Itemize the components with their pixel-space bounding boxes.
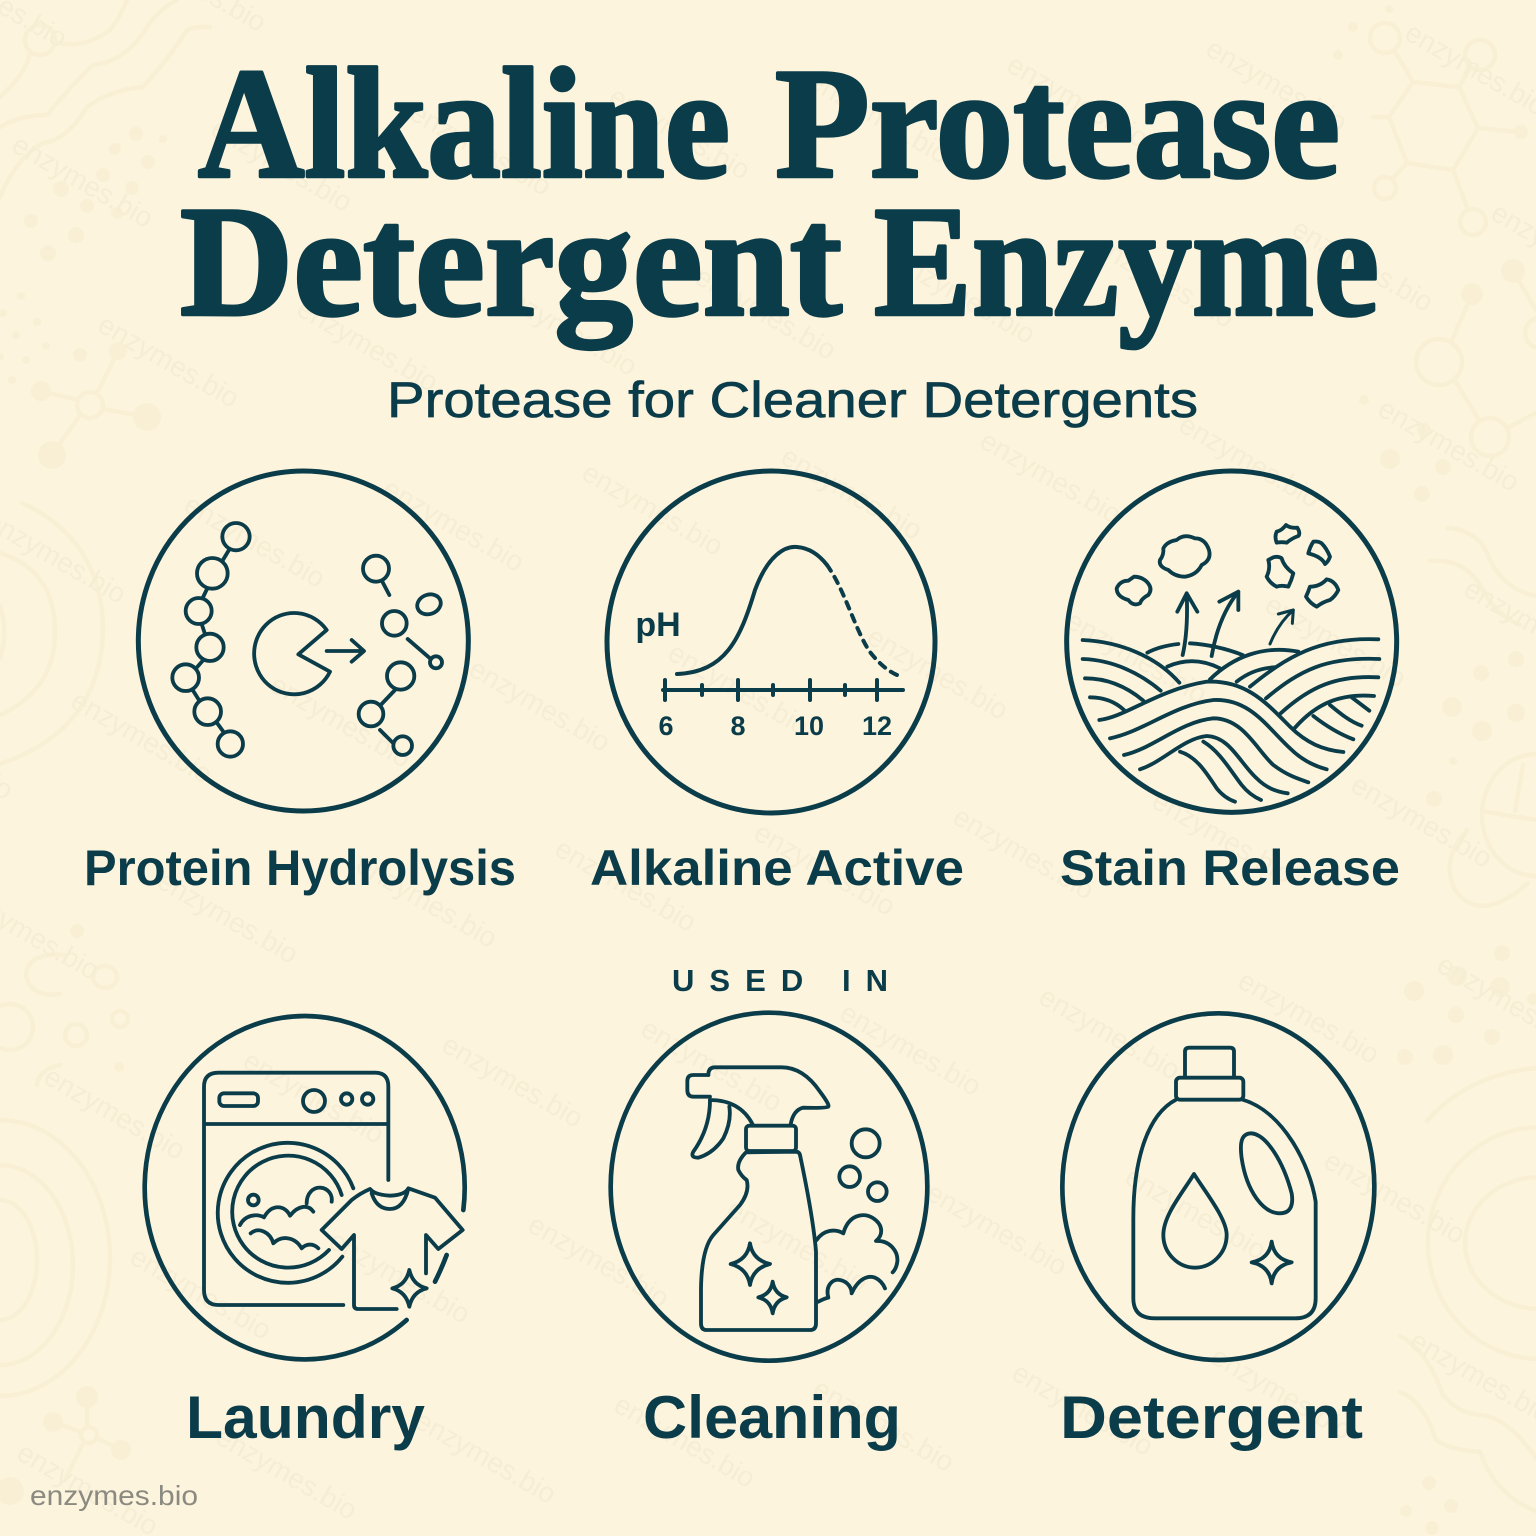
panel: alkaline active — [590, 471, 964, 896]
icon: spray bottle — [611, 1013, 927, 1361]
panel: laundry — [145, 1016, 465, 1451]
icon: pH activity curve: 6 — [658, 711, 674, 741]
icon: pH activity curve: 12 — [862, 711, 892, 741]
title: Detergent — [180, 174, 842, 350]
watermarks: enzymes.bio — [808, 1372, 960, 1478]
panel: stain release — [1060, 471, 1400, 896]
watermarks: enzymes.bio — [1147, 784, 1299, 890]
watermarks: enzymes.bio — [1319, 1144, 1471, 1250]
subtitle: Protease for Cleaner Detergents — [387, 372, 1198, 428]
watermarks: enzymes.bio — [1233, 964, 1385, 1070]
panel: protein hydrolysis — [84, 471, 516, 896]
title — [180, 36, 1379, 350]
title: Protease — [775, 36, 1340, 212]
watermarks: enzymes.bio — [1061, 604, 1213, 710]
watermarks: enzymes.bio — [921, 1176, 1073, 1282]
watermarks: enzymes.bio — [663, 636, 815, 742]
label: protein hydrolysis: Protein Hydrolysis — [84, 840, 516, 896]
watermarks: enzymes.bio — [604, 80, 756, 186]
watermarks: enzymes.bio — [1174, 408, 1326, 514]
watermarks: enzymes.bio — [378, 472, 530, 578]
title: Enzyme — [874, 174, 1379, 350]
watermarks: enzymes.bio — [292, 292, 444, 398]
icon: stain release — [1067, 471, 1397, 812]
watermarks: enzymes.bio — [1120, 1160, 1272, 1266]
watermarks: enzymes.bio — [577, 456, 729, 562]
watermarks: enzymes.bio — [179, 488, 331, 594]
watermarks: enzymes.bio — [405, 96, 557, 202]
watermarks: enzymes.bio — [464, 652, 616, 758]
icon: pH activity curve: 10 — [794, 711, 824, 741]
watermarks: enzymes.bio — [776, 440, 928, 546]
watermarks: enzymes.bio — [835, 996, 987, 1102]
watermarks: enzymes.bio — [324, 1224, 476, 1330]
label: stain release: Stain Release — [1060, 840, 1400, 896]
watermarks: enzymes.bio — [265, 668, 417, 774]
icon: pH activity curve: 8 — [730, 711, 746, 741]
icon: pH activity curve: pH — [635, 606, 681, 644]
watermarks: enzymes.bio — [523, 1208, 675, 1314]
icon: washing machine and shirt — [145, 1016, 465, 1359]
watermarks: enzymes.bio — [125, 1240, 277, 1346]
watermarks: enzymes.bio — [491, 276, 643, 382]
watermarks: enzymes.bio — [93, 308, 245, 414]
watermarks: enzymes.bio — [66, 684, 218, 790]
watermarks: enzymes.bio — [351, 848, 503, 954]
icon: detergent bottle — [1062, 1013, 1374, 1360]
watermarks: enzymes.bio — [1002, 48, 1154, 154]
watermarks: enzymes.bio — [889, 244, 1041, 350]
watermarks: enzymes.bio — [206, 112, 358, 218]
watermarks: enzymes.bio — [1346, 768, 1498, 874]
watermarks: enzymes.bio — [1007, 1356, 1159, 1462]
watermarks: enzymes.bio — [7, 128, 159, 234]
icon: pH activity curve — [607, 471, 935, 813]
watermarks: enzymes.bio — [437, 1028, 589, 1134]
watermarks: enzymes.bio — [550, 832, 702, 938]
watermarks: enzymes.bio — [722, 1192, 874, 1298]
title: Alkaline — [198, 36, 730, 212]
watermarks: enzymes.bio — [636, 1012, 788, 1118]
label: detergent: Detergent — [1060, 1384, 1363, 1451]
watermarks: enzymes.bio — [803, 64, 955, 170]
section heading: used in: USED IN — [672, 963, 888, 998]
label: laundry: Laundry — [186, 1384, 426, 1451]
icon: protein hydrolysis — [138, 471, 468, 811]
watermarks: enzymes.bio — [211, 1420, 363, 1526]
watermarks: enzymes.bio — [152, 864, 304, 970]
label: cleaning: Cleaning — [643, 1384, 901, 1451]
watermarks: enzymes.bio — [410, 1404, 562, 1510]
panel: detergent — [1060, 1013, 1374, 1451]
watermarks: enzymes.bio — [749, 816, 901, 922]
watermarks: enzymes.bio — [1088, 228, 1240, 334]
watermarks: enzymes.bio — [238, 1044, 390, 1150]
watermarks: enzymes.bio — [975, 424, 1127, 530]
label: alkaline active: Alkaline Active — [590, 840, 964, 896]
watermarks: enzymes.bio — [39, 1060, 191, 1166]
watermarks: enzymes.bio — [690, 260, 842, 366]
watermarks: enzymes.bio — [862, 620, 1014, 726]
watermarks: enzymes.bio — [1034, 980, 1186, 1086]
panel: cleaning — [611, 1013, 927, 1451]
watermarks: enzymes.bio — [1206, 1340, 1358, 1446]
watermarks: enzymes.bio — [1201, 32, 1353, 138]
footer brand: enzymes.bio — [30, 1480, 198, 1511]
watermarks: enzymes.bio — [609, 1388, 761, 1494]
watermarks: enzymes.bio — [1260, 588, 1412, 694]
watermarks: enzymes.bio — [948, 800, 1100, 906]
watermarks: enzymes.bio — [1287, 212, 1439, 318]
watermarks: enzymes.bio — [1373, 392, 1525, 498]
